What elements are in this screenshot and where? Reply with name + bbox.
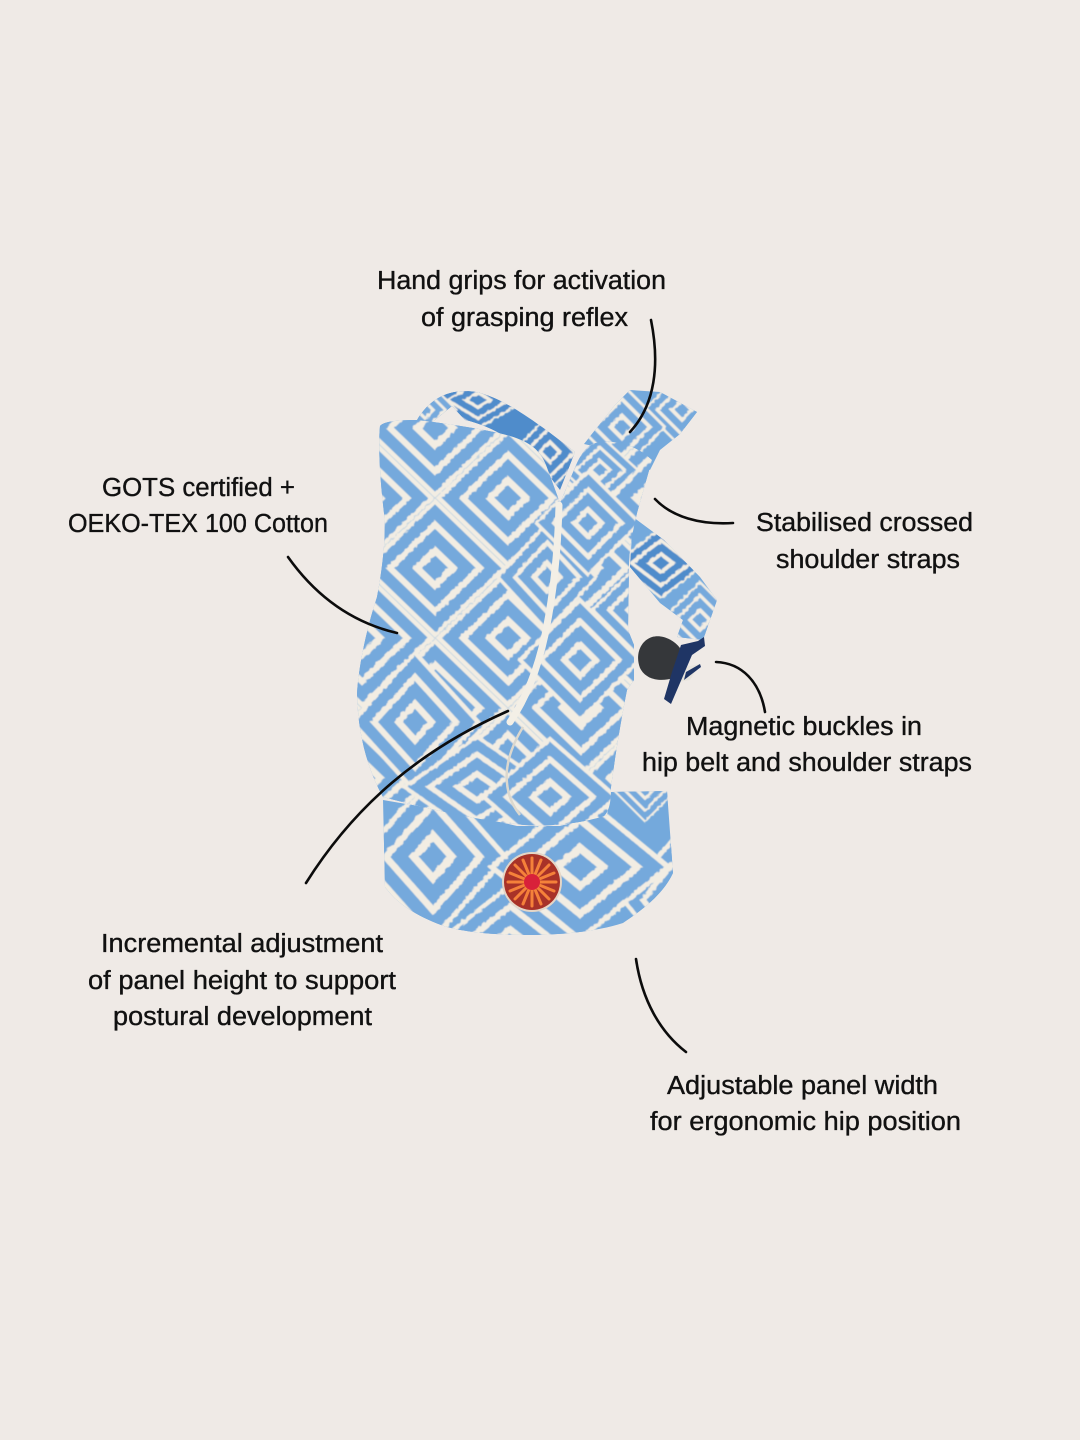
arrow: panel width bbox=[636, 959, 686, 1052]
label: hand grips bbox=[377, 267, 666, 332]
carrier: centre seam bbox=[507, 727, 523, 815]
label: hand grips: of grasping reflex bbox=[421, 304, 628, 332]
arrow: shoulder straps bbox=[655, 499, 733, 523]
label: hand grips: Hand grips for activation bbox=[377, 267, 666, 295]
carrier: hip belt bbox=[383, 791, 673, 935]
cream buckle tab bbox=[678, 664, 700, 682]
black buckle bbox=[638, 636, 680, 680]
label: panel width: for ergonomic hip position bbox=[650, 1108, 961, 1136]
carrier: main body panel bbox=[357, 420, 652, 826]
carrier: magnetic buckle bbox=[638, 636, 705, 704]
label: panel height: of panel height to support bbox=[88, 967, 396, 995]
label: panel width: Adjustable panel width bbox=[667, 1072, 938, 1100]
carrier: top back strap bbox=[417, 391, 575, 490]
carrier: right shoulder strap upper bbox=[584, 390, 697, 470]
label: panel height bbox=[88, 930, 396, 1031]
label: panel height: postural development bbox=[113, 1003, 372, 1031]
label: panel height: Incremental adjustment bbox=[101, 930, 383, 958]
navy webbing bbox=[664, 637, 705, 704]
label: shoulder straps: Stabilised crossed bbox=[756, 509, 973, 537]
carrier: sun logo badge bbox=[502, 852, 562, 912]
label: cotton certification: GOTS certified + bbox=[102, 474, 295, 502]
carrier: centre zipper bbox=[510, 505, 559, 722]
arrow: magnetic buckles bbox=[716, 662, 765, 712]
illustration: baby carrier bbox=[340, 370, 740, 1008]
label: magnetic buckles: hip belt and shoulder straps bbox=[642, 749, 972, 777]
label: magnetic buckles: Magnetic buckles in bbox=[686, 713, 922, 741]
label: cotton certification: OEKO-TEX 100 Cotton bbox=[68, 510, 328, 538]
carrier: right shoulder strap lower bbox=[630, 519, 717, 640]
arrow: panel height bbox=[306, 711, 508, 883]
label: magnetic buckles bbox=[642, 713, 972, 777]
label: shoulder straps bbox=[756, 509, 973, 574]
leader lines bbox=[288, 320, 765, 1052]
label: cotton certification bbox=[68, 474, 328, 538]
label: shoulder straps: shoulder straps bbox=[776, 546, 960, 574]
label: panel width bbox=[650, 1072, 961, 1136]
arrow: cotton fabric bbox=[288, 557, 397, 633]
arrow: hand grips bbox=[630, 320, 655, 432]
